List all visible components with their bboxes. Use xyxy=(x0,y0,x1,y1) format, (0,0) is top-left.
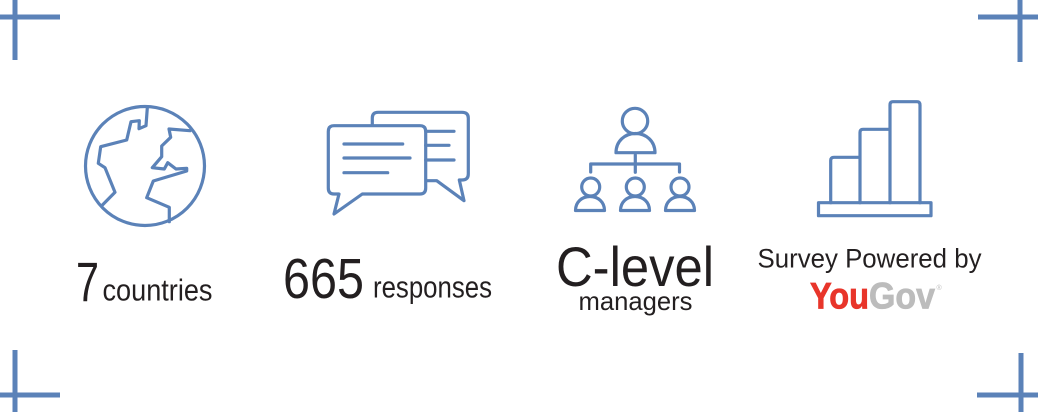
text: survey powered by: Survey Powered by xyxy=(758,244,982,274)
icon: org chart of people xyxy=(576,108,694,210)
logo: YouGov: You xyxy=(810,276,869,316)
logo: YouGov: Gov xyxy=(869,276,935,316)
logo: YouGov: ® xyxy=(936,284,942,292)
corner mark: top left xyxy=(0,0,60,60)
logo: YouGov xyxy=(810,276,942,316)
corner mark: bottom left xyxy=(0,350,60,412)
stat: 665 responses xyxy=(283,247,492,311)
stat: 665 responses: 665 xyxy=(283,247,364,311)
stat: C-level managers: managers xyxy=(578,286,692,316)
stat: C-level managers: C-level xyxy=(556,235,714,298)
stat: 665 responses: responses xyxy=(373,270,492,304)
stat: 7 countries: 7 xyxy=(76,250,99,313)
icon: bar chart xyxy=(818,102,931,216)
corner mark: top right xyxy=(978,0,1038,62)
stat: 7 countries: countries xyxy=(102,272,212,308)
stat: 7 countries xyxy=(76,250,212,313)
icon: globe xyxy=(86,106,204,226)
corner mark: bottom right xyxy=(977,353,1038,412)
icon: speech bubbles xyxy=(328,112,468,214)
